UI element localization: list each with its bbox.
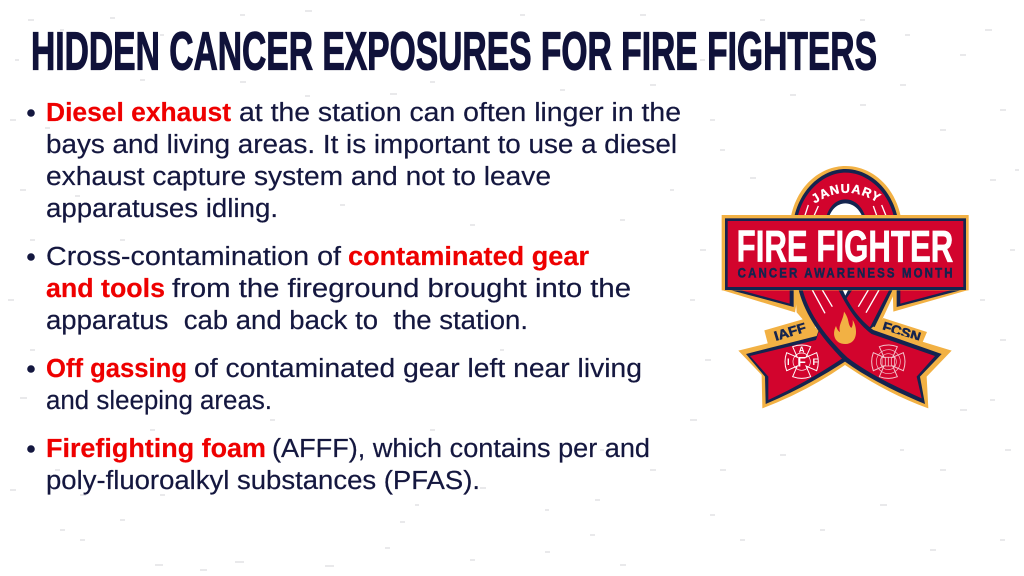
- bullet 1: diesel exhaust: [27, 99, 681, 223]
- bullet 2: cross-contamination: from the fireground brought into the: [172, 275, 631, 303]
- arched text: January: JANUARY: [812, 184, 882, 203]
- bullet 4: firefighting foam: (AFFF), which contains per and: [272, 435, 650, 463]
- icon: IAFF maltese cross: F: [797, 354, 806, 370]
- bullet 1: diesel exhaust: Diesel exhaust: [46, 99, 232, 127]
- white gap below banner: [838, 288, 853, 300]
- label: IAFF: IAFF: [772, 320, 808, 344]
- bullet 4: firefighting foam: [27, 435, 650, 495]
- bullet 3: off gassing: Off gassing: [46, 355, 187, 383]
- icon: FCSN maltese cross: [872, 345, 905, 378]
- bullet 2: cross-contamination: apparatus cab and back to the station.: [46, 307, 528, 335]
- bullet 1: diesel exhaust: exhaust capture system and not to leave: [46, 163, 551, 191]
- icon: flame: [834, 312, 856, 344]
- label: IAFF: [764, 318, 819, 346]
- bullet list: [27, 99, 681, 495]
- bullet 3: off gassing: and sleeping areas.: [46, 387, 272, 415]
- bullet 3: off gassing: [27, 355, 642, 415]
- banner subtitle: CANCER AWARENESS MONTH: [738, 265, 953, 281]
- icon: IAFF maltese cross: A: [799, 345, 805, 354]
- bullet 1: diesel exhaust: bays and living areas. It is important to use a diesel: [46, 131, 677, 159]
- bullet 1: diesel exhaust: apparatuses idling.: [46, 195, 278, 223]
- icon: IAFF maltese cross: [785, 345, 818, 378]
- icon: IAFF maltese cross: F: [812, 357, 818, 367]
- gold wedge beside left strand: [795, 288, 817, 333]
- bullet 4: firefighting foam: Firefighting foam: [46, 435, 266, 463]
- left ribbon tail, back strand: [738, 288, 897, 408]
- bullet 3: off gassing: of contaminated gear left near living: [194, 355, 642, 383]
- bullet 2: cross-contamination: and tools: [46, 275, 165, 303]
- icon: IAFF maltese cross: I: [787, 357, 790, 367]
- label: FCSN: FCSN: [881, 319, 923, 345]
- bullet 2: cross-contamination: contaminated gear: [348, 243, 589, 271]
- logo: fire fighter cancer awareness month ribbon: [722, 166, 969, 408]
- ribbon top loop: [790, 166, 902, 222]
- bullet 2: cross-contamination: Cross-contamination of: [46, 243, 342, 271]
- banner folds: [722, 288, 968, 312]
- label: FCSN: [873, 318, 927, 345]
- bullet 1: diesel exhaust: at the station can often linger in the: [239, 99, 681, 127]
- main banner: [722, 215, 969, 290]
- bullet 2: cross-contamination: [27, 243, 631, 335]
- right ribbon tail, front strand: [798, 288, 952, 408]
- bullet 4: firefighting foam: poly-fluoroalkyl substances (PFAS).: [46, 467, 480, 495]
